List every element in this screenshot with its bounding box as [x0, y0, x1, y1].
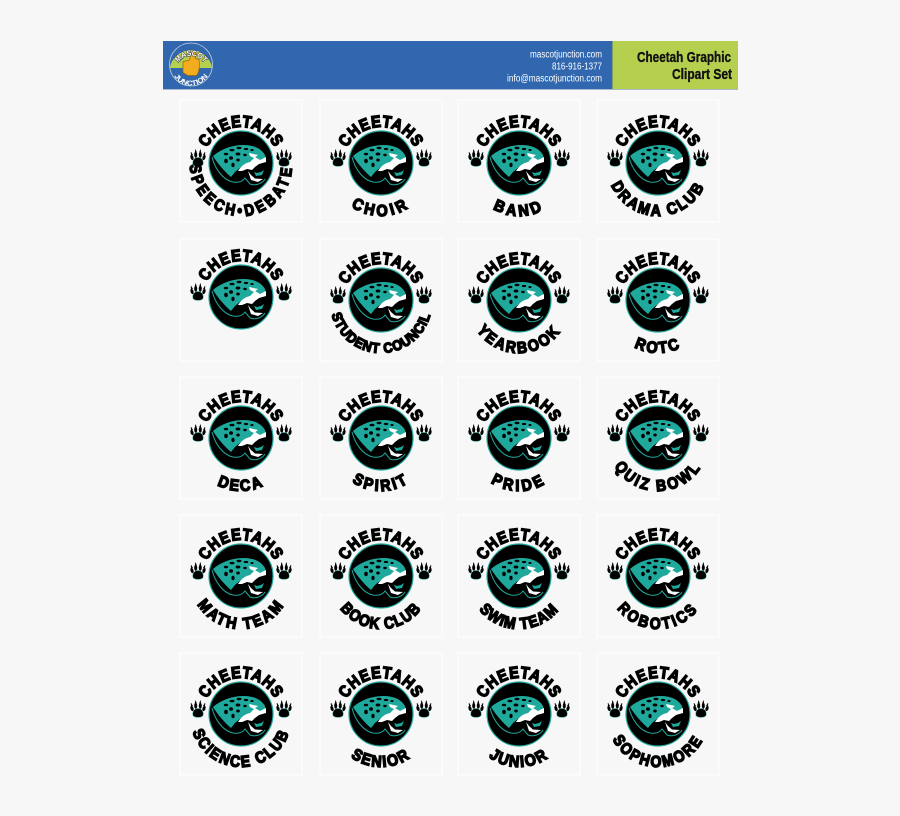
badge: Band: BAND: [492, 198, 541, 218]
badge: ROTC: ROTC: [634, 336, 680, 354]
badge: ROTC: [607, 252, 709, 354]
badge: Spirit: [330, 390, 432, 492]
title: Clipart Set: [672, 66, 732, 83]
badge: Science Club: [190, 666, 292, 768]
badge: Math Team: MATH TEAM: [196, 597, 284, 630]
badge: Student Council: STUDENT COUNCIL: [332, 312, 432, 354]
contact details: 816-916-1377: [552, 62, 602, 72]
badge: Swim Team: SWIM TEAM: [480, 602, 559, 630]
badge: Sophomore: [607, 666, 709, 768]
logo: Mascot Junction: MASCOT: [174, 50, 209, 63]
badge: Choir: CHOIR: [352, 198, 410, 217]
title: [637, 49, 732, 83]
badge: Senior: SENIOR: [351, 748, 412, 768]
badge: Yearbook: [468, 252, 570, 354]
badge: Speech Debate: [189, 114, 293, 217]
badge: Yearbook: YEARBOOK: [478, 322, 562, 354]
badge: Swim Team: [468, 528, 570, 630]
badge: Math Team: [190, 528, 292, 630]
badge: Quiz Bowl: QUIZ BOWL: [614, 461, 702, 492]
contact details: [507, 50, 602, 84]
contact details: mascotjunction.com: [530, 50, 602, 60]
badge: Choir: [330, 114, 432, 217]
badge: Cheetahs blank: [180, 239, 302, 361]
badge: DECA: DECA: [216, 474, 264, 492]
badge: Spirit: SPIRIT: [352, 472, 406, 492]
logo: Mascot Junction: [169, 42, 213, 86]
badge: Band: [468, 114, 570, 218]
badge: Pride: PRIDE: [490, 472, 545, 492]
logo: Mascot Junction: JUNCTION: [174, 74, 208, 86]
title: Cheetah Graphic: [637, 49, 731, 66]
badge: Robotics: ROBOTICS: [616, 600, 696, 630]
badge: Senior: [330, 666, 432, 768]
badge: Drama Club: DRAMA CLUB: [610, 180, 704, 217]
badge: Robotics: [607, 528, 709, 630]
badge: DECA: [190, 390, 292, 492]
badge: Speech Debate: SPEECH•DEBATE: [189, 164, 293, 217]
badge: Drama Club: [607, 114, 709, 217]
contact details: info@mascotjunction.com: [507, 74, 602, 84]
badge: Sophomore: SOPHOMORE: [613, 734, 704, 768]
header bar: [163, 41, 738, 90]
badge: Pride: [468, 390, 570, 492]
badge: Junior: [468, 666, 570, 768]
badge: Junior: JUNIOR: [489, 748, 550, 768]
badge: Science Club: SCIENCE CLUB: [192, 728, 288, 768]
badge: Quiz Bowl: [607, 390, 709, 492]
badge: Student Council: [330, 252, 432, 354]
badge: Book Club: BOOK CLUB: [339, 600, 420, 630]
badge: Book Club: [330, 528, 432, 630]
